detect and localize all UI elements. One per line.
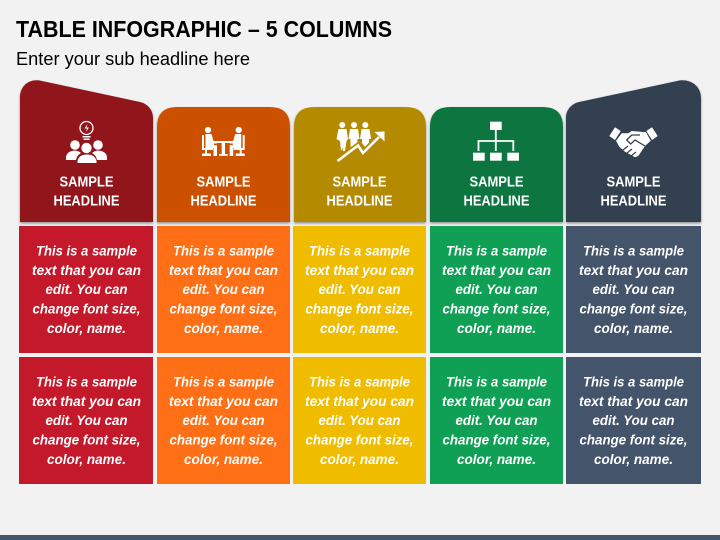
cell: column 1 row 1 bbox=[19, 226, 153, 353]
headline: column 4: HEADLINE bbox=[464, 193, 530, 210]
cell: column 3 row 2: change font size, bbox=[306, 432, 414, 448]
cell: column 2 row 2: edit. You can bbox=[182, 412, 264, 428]
cell: column 3 row 1 bbox=[293, 226, 426, 353]
cell: column 3 row 1: color, name. bbox=[320, 320, 399, 336]
column 3 bbox=[293, 107, 426, 484]
cell: column 4 row 2 bbox=[430, 357, 563, 484]
cell: column 1 row 1: text that you can bbox=[32, 262, 141, 278]
header panel: column 5 bbox=[566, 80, 701, 222]
cell: column 3 row 2: text that you can bbox=[305, 393, 414, 409]
cell: column 2 row 2: This is a sample bbox=[173, 374, 274, 390]
cell: column 1 row 2: color, name. bbox=[47, 451, 126, 467]
cell: column 2 row 1: color, name. bbox=[184, 320, 263, 336]
cell: column 2 row 2: text that you can bbox=[169, 393, 278, 409]
cell: column 1 row 2: edit. You can bbox=[46, 412, 128, 428]
headline: column 3: HEADLINE bbox=[326, 193, 392, 210]
headline: column 3: SAMPLE bbox=[332, 174, 386, 191]
cell: column 5 row 2: change font size, bbox=[580, 432, 688, 448]
headline: column 2: HEADLINE bbox=[190, 193, 256, 210]
header panel: column 1 bbox=[20, 80, 153, 222]
headline: column 1 bbox=[54, 174, 120, 210]
cell: column 2 row 1 bbox=[157, 226, 290, 353]
cell: column 1 row 2: This is a sample bbox=[36, 374, 137, 390]
cell: column 1 row 2: change font size, bbox=[32, 432, 140, 448]
cell: column 4 row 1 bbox=[430, 226, 563, 353]
cell: column 4 row 2: color, name. bbox=[457, 451, 536, 467]
cell: column 2 row 1: text that you can bbox=[169, 262, 278, 278]
headline: column 3 bbox=[326, 174, 392, 210]
cell: column 5 row 2: This is a sample bbox=[583, 374, 684, 390]
header panel: column 4 bbox=[430, 107, 563, 222]
cell: column 3 row 1: text that you can bbox=[305, 262, 414, 278]
icon: team with rising arrow bbox=[336, 122, 384, 162]
cell: column 4 row 2: text that you can bbox=[442, 393, 551, 409]
cell: column 3 row 1: This is a sample bbox=[309, 243, 410, 259]
header panel: column 3 bbox=[294, 107, 426, 222]
cell: column 1 row 2: text that you can bbox=[32, 393, 141, 409]
cell: column 5 row 1: edit. You can bbox=[592, 281, 674, 297]
headline: column 5: SAMPLE bbox=[606, 174, 660, 191]
title: TABLE INFOGRAPHIC – 5 COLUMNS bbox=[16, 16, 392, 42]
subtitle: Enter your sub headline here bbox=[16, 49, 250, 69]
cell: column 5 row 1: color, name. bbox=[594, 320, 673, 336]
footer bar bbox=[0, 535, 720, 540]
cell: column 3 row 2: color, name. bbox=[320, 451, 399, 467]
cell: column 4 row 1: text that you can bbox=[442, 262, 551, 278]
cell: column 4 row 1: color, name. bbox=[457, 320, 536, 336]
cell: column 3 row 2: edit. You can bbox=[318, 412, 400, 428]
cell: column 2 row 1: change font size, bbox=[170, 300, 278, 316]
headline: column 2 bbox=[190, 174, 256, 210]
cell: column 1 row 1: color, name. bbox=[47, 320, 126, 336]
cell: column 5 row 1 bbox=[566, 226, 701, 353]
cell: column 2 row 1: edit. You can bbox=[182, 281, 264, 297]
cell: column 2 row 2: change font size, bbox=[170, 432, 278, 448]
cell: column 1 row 1: change font size, bbox=[32, 300, 140, 316]
cell: column 5 row 2: color, name. bbox=[594, 451, 673, 467]
icon: handshake bbox=[609, 127, 658, 157]
cell: column 5 row 1: This is a sample bbox=[583, 243, 684, 259]
headline: column 1: HEADLINE bbox=[54, 193, 120, 210]
cell: column 1 row 2 bbox=[19, 357, 153, 484]
icon: org chart bbox=[473, 122, 519, 161]
cell: column 5 row 2 bbox=[566, 357, 701, 484]
cell: column 5 row 1: change font size, bbox=[580, 300, 688, 316]
headline: column 4 bbox=[464, 174, 530, 210]
cell: column 2 row 2 bbox=[157, 357, 290, 484]
header panel: column 2 bbox=[157, 107, 290, 222]
cell: column 4 row 2: edit. You can bbox=[456, 412, 538, 428]
icon: people with light bulb bbox=[66, 122, 107, 163]
cell: column 3 row 2 bbox=[293, 357, 426, 484]
column 2 bbox=[157, 107, 290, 484]
cell: column 3 row 1: change font size, bbox=[306, 300, 414, 316]
cell: column 2 row 2: color, name. bbox=[184, 451, 263, 467]
column 1 bbox=[19, 80, 153, 484]
cell: column 1 row 1: This is a sample bbox=[36, 243, 137, 259]
cell: column 4 row 2: This is a sample bbox=[446, 374, 547, 390]
headline: column 4: SAMPLE bbox=[470, 174, 524, 191]
cell: column 4 row 2: change font size, bbox=[442, 432, 550, 448]
cell: column 4 row 1: edit. You can bbox=[456, 281, 538, 297]
cell: column 5 row 2: text that you can bbox=[579, 393, 688, 409]
headline: column 2: SAMPLE bbox=[196, 174, 250, 191]
cell: column 5 row 2: edit. You can bbox=[592, 412, 674, 428]
cell: column 3 row 1: edit. You can bbox=[318, 281, 400, 297]
cell: column 4 row 1: change font size, bbox=[442, 300, 550, 316]
headline: column 5 bbox=[600, 174, 666, 210]
icon: meeting at table bbox=[202, 127, 245, 156]
cell: column 1 row 1: edit. You can bbox=[46, 281, 128, 297]
column 5 bbox=[566, 80, 701, 484]
cell: column 2 row 1: This is a sample bbox=[173, 243, 274, 259]
headline: column 1: SAMPLE bbox=[60, 174, 114, 191]
headline: column 5: HEADLINE bbox=[600, 193, 666, 210]
cell: column 4 row 1: This is a sample bbox=[446, 243, 547, 259]
column 4 bbox=[430, 107, 563, 484]
cell: column 3 row 2: This is a sample bbox=[309, 374, 410, 390]
cell: column 5 row 1: text that you can bbox=[579, 262, 688, 278]
